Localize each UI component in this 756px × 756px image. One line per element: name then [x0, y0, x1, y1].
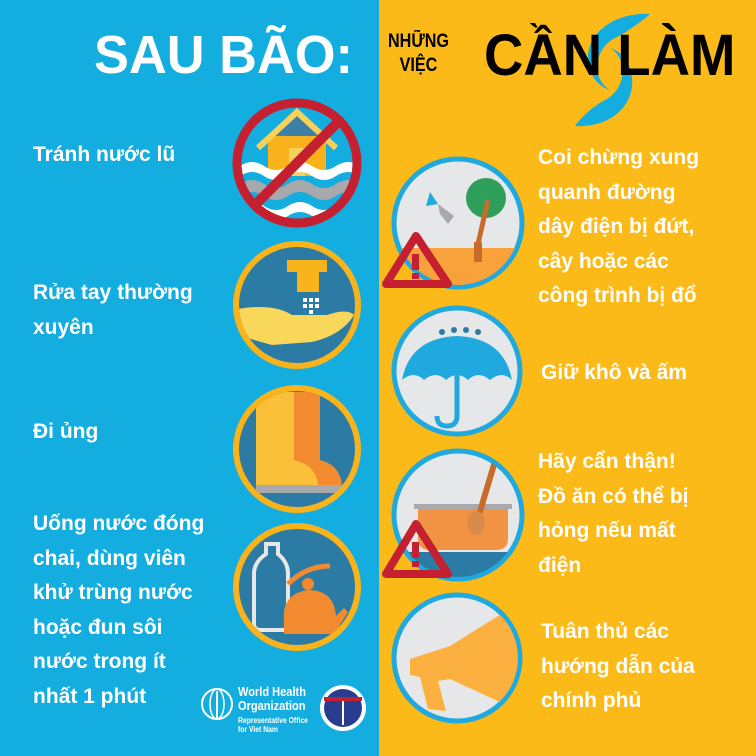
icon: cooking pot with warning: [382, 448, 524, 582]
right text: Coi chừng: quanh đường: [538, 181, 675, 204]
left text: Rửa tay: xuyên: [33, 316, 94, 339]
logo: WHO: Representative Office: [238, 716, 308, 725]
right text: Coi chừng: dây điện bị đứt,: [538, 215, 694, 238]
icon: boots: [233, 385, 361, 513]
right text: Coi chừng: Coi chừng xung: [538, 146, 699, 169]
icon: hand washing: [233, 241, 361, 369]
title: NHỮNG: [388, 31, 449, 52]
left text: Uống nước: hoặc đun sôi: [33, 616, 163, 639]
logo: WHO: for Viet Nam: [238, 725, 278, 734]
right text: Tuân thủ: [541, 620, 695, 712]
left text: Uống nước: nước trong ít: [33, 650, 166, 673]
left text: Uống nước: nhất 1 phút: [33, 685, 146, 708]
right text: Tuân thủ: chính phủ: [541, 689, 641, 712]
right text: Coi chừng: [538, 146, 699, 307]
right text: Coi chừng: cây hoặc các: [538, 250, 669, 273]
title: VIỆC: [400, 55, 437, 76]
left text: Uống nước: [33, 512, 204, 708]
icon: flood no-sign: [232, 98, 362, 228]
title: [94, 23, 735, 88]
left text: Uống nước: khử trùng nước: [33, 581, 193, 604]
right text: Coi chừng: công trình bị đổ: [538, 284, 697, 307]
right text: Giữ khô: Giữ khô và ấm: [541, 361, 687, 384]
right text: Hãy cẩn thận: hỏng nếu mất: [538, 519, 676, 542]
left text: Uống nước: Uống nước đóng: [33, 512, 204, 535]
right text: Hãy cẩn thận: Đồ ăn có thể bị: [538, 485, 689, 508]
icon: hazards (lightning, tree, warning): [382, 156, 524, 290]
left text: Rửa tay: Rửa tay thường: [33, 281, 193, 304]
right text: Hãy cẩn thận: Hãy cẩn thận!: [538, 450, 676, 473]
right text: Tuân thủ: hướng dẫn của: [541, 655, 695, 678]
logo: WHO: [201, 684, 308, 734]
right text: Hãy cẩn thận: điện: [538, 554, 581, 577]
icon: umbrella: [392, 306, 522, 436]
title: CẦN LÀM: [484, 23, 735, 88]
left text: Uống nước: chai, dùng viên: [33, 547, 186, 570]
title: SAU BÃO:: [94, 25, 353, 85]
right text: Tuân thủ: Tuân thủ các: [541, 620, 669, 643]
left text: Tránh nước lũ: Tránh nước lũ: [33, 143, 175, 166]
right text: Hãy cẩn thận: [538, 450, 689, 577]
logo: WHO: World Health: [238, 684, 306, 699]
left text: Đi ủng: Đi ủng: [33, 420, 98, 443]
left text: Rửa tay: [33, 281, 193, 339]
icon: megaphone: [392, 592, 522, 724]
icon: storm symbol: [575, 14, 650, 126]
icon: bottle and kettle: [233, 523, 361, 651]
logo: Ministry of Health: [320, 685, 366, 731]
logo: WHO: Organization: [238, 698, 306, 713]
